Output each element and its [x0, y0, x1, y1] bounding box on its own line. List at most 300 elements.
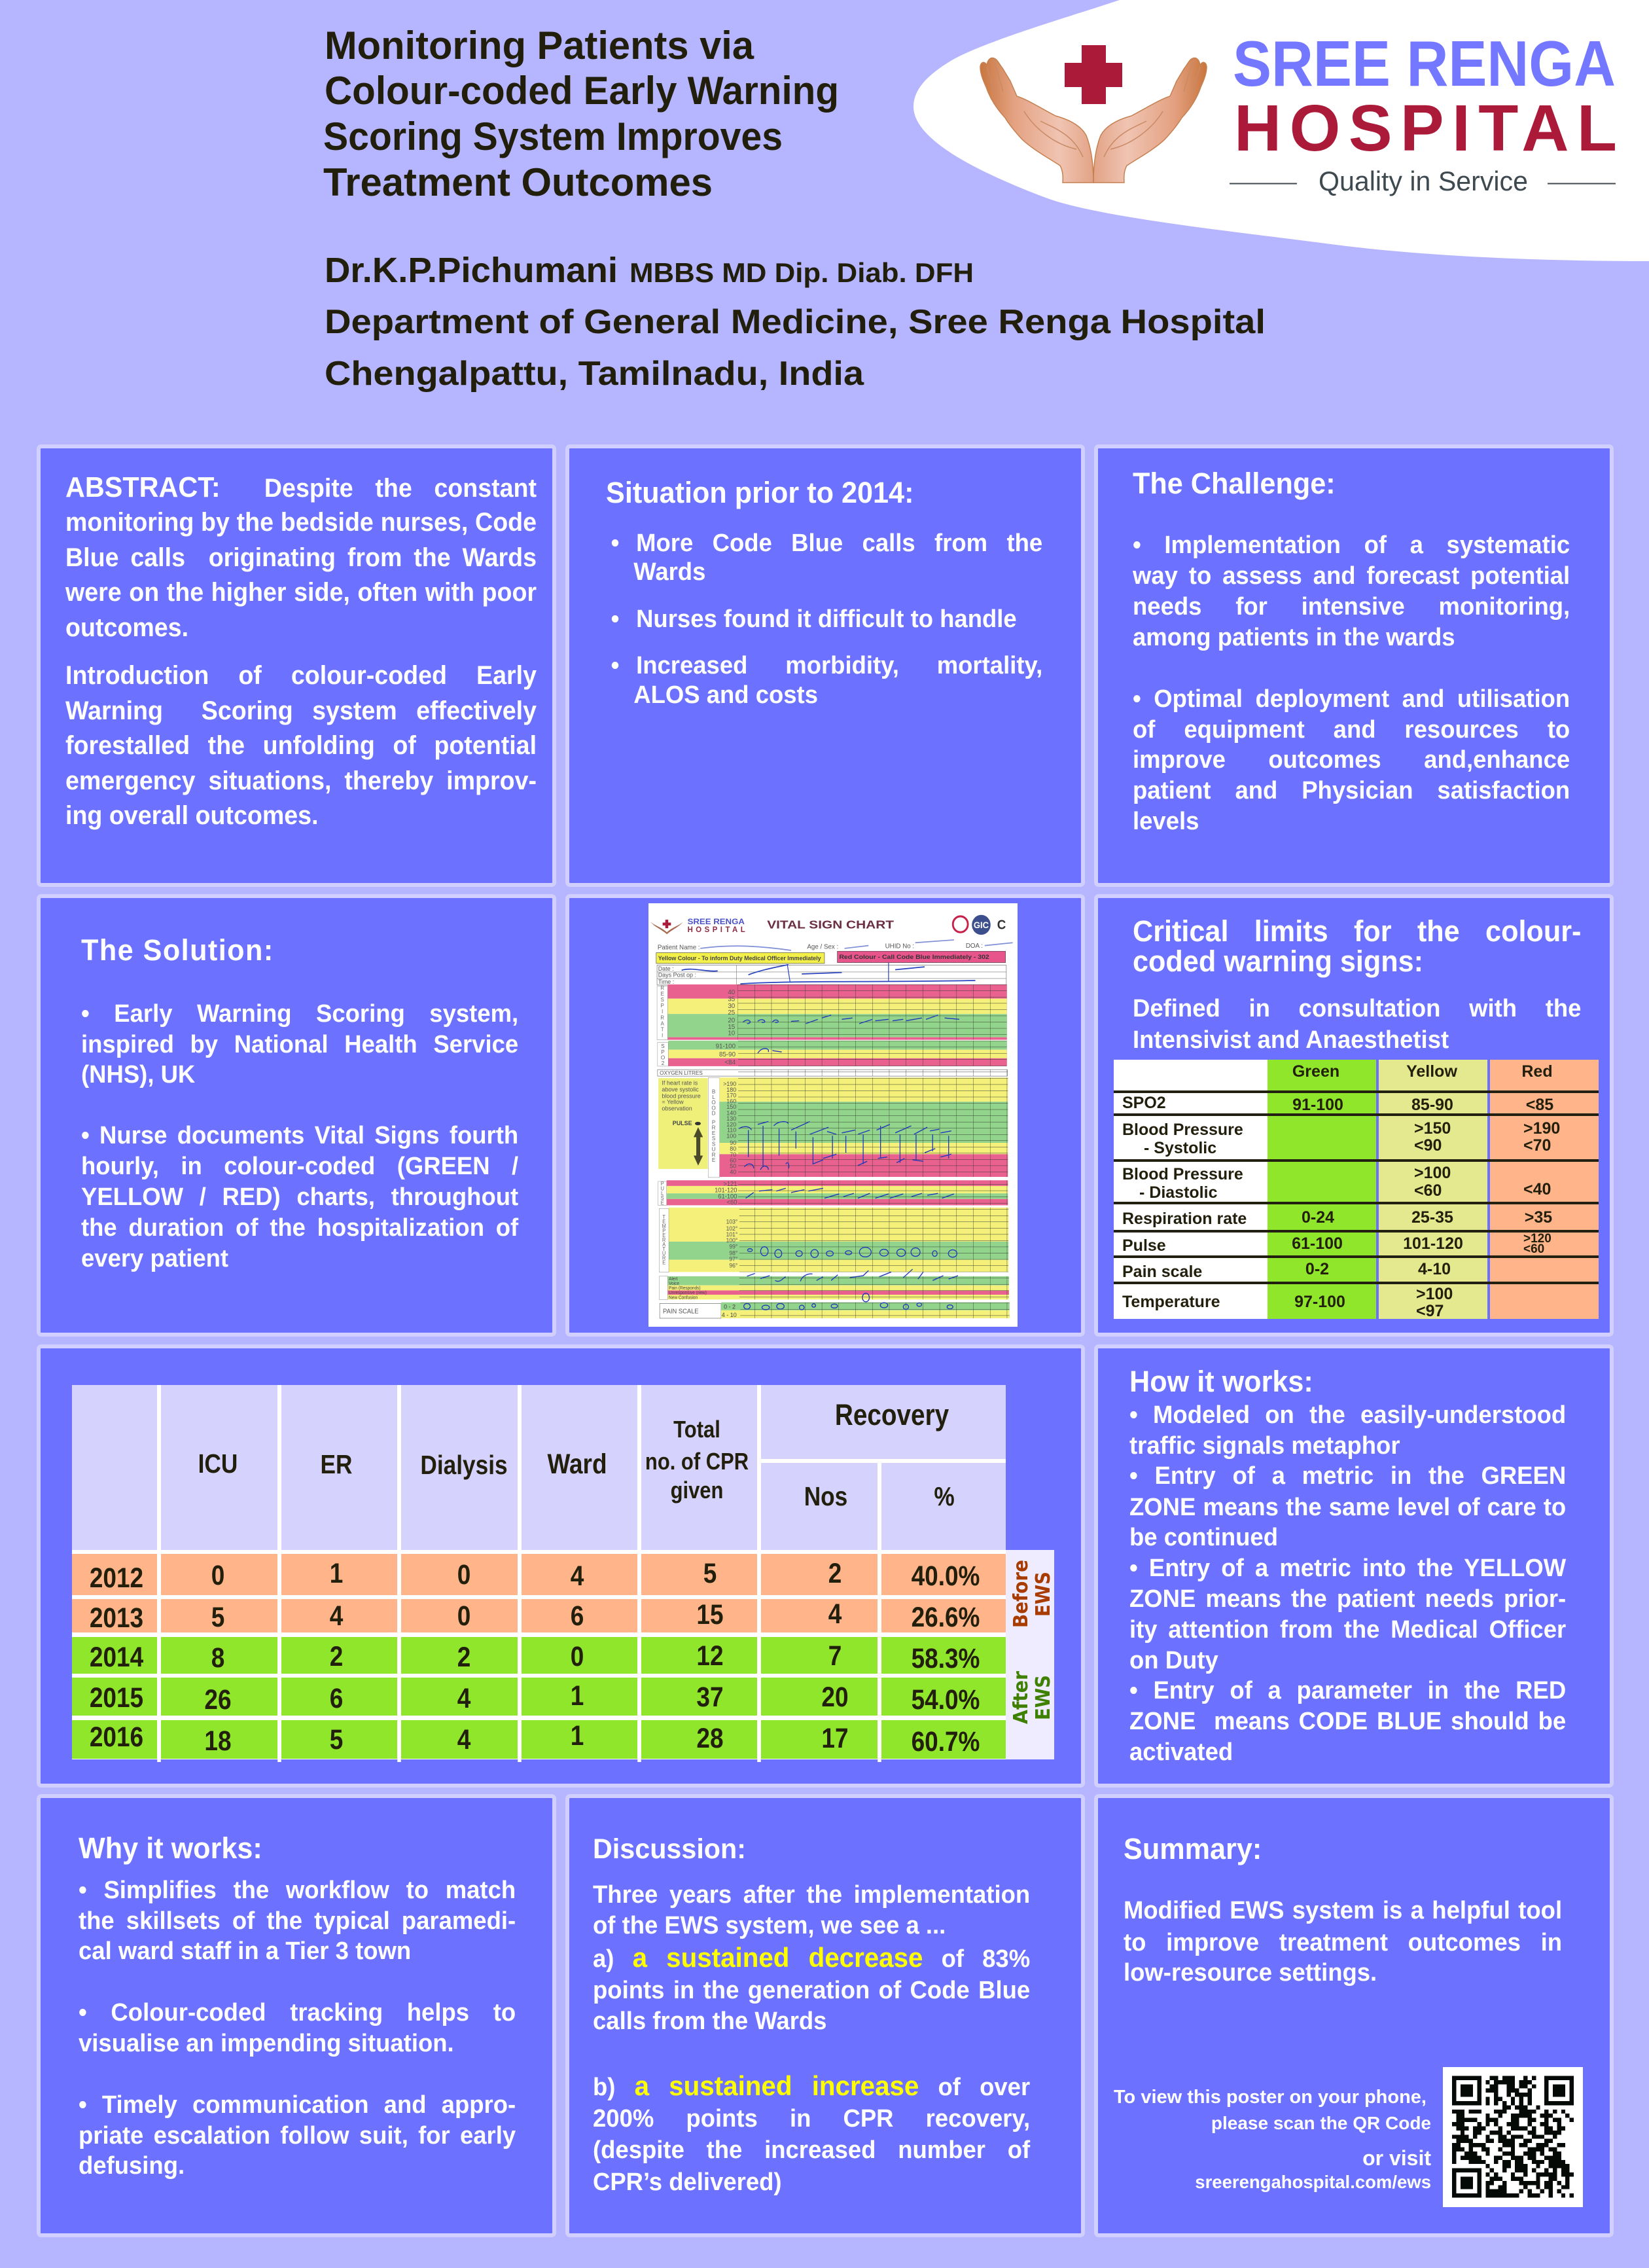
- limit values: 0-2: [1305, 1260, 1329, 1278]
- temperature band: E: [662, 1233, 665, 1238]
- row labels: - Diastolic: [1139, 1183, 1218, 1202]
- text: how it works content: ZONE means the same level of care to: [1129, 1494, 1566, 1521]
- blood pressure band: 70: [730, 1151, 736, 1158]
- blood pressure band: blood pressure: [662, 1092, 701, 1100]
- text: situation content: More Code Blue calls from the: [636, 530, 1042, 557]
- text: challenge content: • Implementation of a systematic: [1133, 531, 1570, 559]
- text: discussion content: calls from the Wards: [593, 2007, 826, 2035]
- text: situation content: [606, 476, 1042, 709]
- row 2012: 1: [330, 1558, 343, 1589]
- text: challenge content: improve outcomes and,enhance: [1133, 746, 1570, 774]
- limit values: >35: [1525, 1208, 1552, 1227]
- row labels: Blood Pressure: [1122, 1121, 1243, 1139]
- text: how it works content: • Entry of a parameter in the RED: [1129, 1677, 1566, 1704]
- row 2015: 20: [821, 1682, 849, 1713]
- temperature band: 98°: [729, 1250, 737, 1256]
- temperature band: 97°: [729, 1255, 737, 1262]
- text: how it works content: • Entry of a metric in the GREEN: [1129, 1462, 1566, 1490]
- respiration band: I: [662, 1009, 663, 1015]
- text: why it works content: priate escalation follow suit, for early: [79, 2122, 516, 2150]
- title: Colour-coded Early Warning: [325, 69, 839, 113]
- authors and affiliation: MBBS MD Dip. Diab. DFH: [629, 257, 974, 288]
- limit values: 101-120: [1403, 1234, 1463, 1253]
- pain scale: PAIN SCALE: [663, 1308, 699, 1316]
- text: discussion content: Discussion:: [593, 1833, 746, 1865]
- pulse band: S: [661, 1195, 664, 1201]
- text: solution content: YELLOW / RED) charts, throughout: [81, 1183, 518, 1211]
- temperature band: 103°: [726, 1218, 737, 1225]
- patient fields: UHID No :: [885, 943, 914, 950]
- text: solution content: The Solution:: [81, 933, 274, 967]
- limit values: <85: [1526, 1096, 1553, 1114]
- blood pressure band: 40: [730, 1168, 736, 1175]
- pulse band: >121: [723, 1181, 737, 1188]
- row 2016: 4: [457, 1724, 471, 1755]
- side label: before and after EWS: After: [1010, 1671, 1033, 1724]
- blood pressure band: 100: [726, 1132, 736, 1140]
- respiration band: E: [661, 991, 664, 997]
- row 2012: 0: [457, 1559, 470, 1591]
- text: solution content: the duration of the hospitalization of: [81, 1214, 518, 1242]
- header cells: [72, 1385, 1006, 1550]
- row 2014: 2014: [90, 1642, 144, 1673]
- limit values: 91-100: [1292, 1096, 1343, 1114]
- column headers: [1292, 1062, 1553, 1081]
- pulse band: L: [661, 1191, 664, 1197]
- panel: how it works: [1094, 1344, 1614, 1788]
- blood pressure band: observation: [662, 1105, 692, 1112]
- row labels: Respiration rate: [1122, 1210, 1247, 1228]
- blood pressure band: R: [712, 1151, 716, 1158]
- row labels: Temperature: [1122, 1293, 1220, 1311]
- header labels: given: [671, 1478, 723, 1504]
- header labels: [198, 1398, 955, 1512]
- row 2013: [90, 1598, 980, 1634]
- respiration band: P: [661, 1003, 664, 1009]
- text: situation content: ALOS and costs: [633, 681, 818, 709]
- text: discussion content: CPR’s delivered): [593, 2169, 782, 2196]
- pulse band: 101-120: [715, 1187, 737, 1195]
- text: solution content: [81, 933, 518, 1272]
- red alert box: Red Colour - Call Code Blue Immediately - 302: [839, 954, 989, 960]
- blood pressure band: = Yellow: [662, 1098, 684, 1106]
- text: how it works content: ZONE means CODE BLUE should be: [1129, 1708, 1566, 1735]
- header labels: no. of CPR: [645, 1449, 749, 1475]
- temperature band: T: [662, 1214, 665, 1220]
- pulse band: E: [661, 1200, 664, 1206]
- text: solution content: every patient: [81, 1245, 228, 1272]
- text: situation content: •: [611, 530, 619, 557]
- limit values: <60: [1523, 1242, 1544, 1256]
- SpO2 band: P: [661, 1049, 665, 1055]
- row 2015: 54.0%: [912, 1684, 980, 1716]
- text: how it works content: How it works:: [1129, 1365, 1313, 1398]
- chart title: VITAL SIGN CHART: [767, 918, 895, 931]
- row 2014: 2: [457, 1642, 470, 1673]
- patient fields: Age / Sex :: [807, 943, 838, 950]
- text: situation content: •: [611, 652, 619, 679]
- row 2015: 2015: [90, 1682, 143, 1714]
- header labels: Total: [673, 1417, 720, 1443]
- row 2013: 2013: [90, 1602, 143, 1634]
- row labels: - Systolic: [1144, 1139, 1216, 1157]
- limit values: >190: [1523, 1119, 1560, 1138]
- blood pressure band: D: [712, 1109, 716, 1117]
- blood pressure band: 130: [726, 1115, 736, 1122]
- column headers: Yellow: [1406, 1062, 1457, 1081]
- neuro band: New Confusion: [669, 1295, 698, 1301]
- row labels: Blood Pressure: [1122, 1165, 1243, 1183]
- pulse band: 61-100: [718, 1193, 737, 1200]
- pulse band: P: [661, 1181, 664, 1187]
- SpO2 band: 85-90: [719, 1051, 736, 1058]
- row 2013: 26.6%: [912, 1602, 980, 1633]
- text: abstract body: ing overall outcomes.: [65, 801, 319, 830]
- text: solution content: hourly, in colour-coded (GREEN /: [81, 1153, 518, 1180]
- text: challenge content: among patients in the wards: [1133, 624, 1455, 651]
- logo wordmark: [1230, 27, 1617, 196]
- row 2012: 5: [703, 1558, 717, 1589]
- row 2012: [90, 1558, 980, 1594]
- limit values: 0-24: [1302, 1208, 1334, 1227]
- text: abstract body: Blue calls originating from the Wards: [65, 543, 537, 572]
- row 2012: 40.0%: [912, 1560, 980, 1592]
- row 2014: 0: [571, 1641, 584, 1672]
- text: how it works content: ity attention from the Medical Officer: [1129, 1616, 1566, 1644]
- respiration band: 10: [728, 1030, 736, 1037]
- text: how it works content: traffic signals metaphor: [1129, 1432, 1400, 1460]
- text: abstract body: ABSTRACT: Despite the constant: [65, 471, 537, 503]
- text: discussion content: Three years after the implementation: [593, 1881, 1030, 1909]
- row 2015: [90, 1680, 980, 1716]
- row 2016: [90, 1720, 980, 1757]
- panel: summary: [1094, 1794, 1614, 2237]
- respiration band: T: [661, 1026, 664, 1033]
- text: discussion content: points in the generation of Code Blue: [593, 1977, 1030, 2004]
- SpO2 band: 2: [662, 1060, 665, 1066]
- text: QR code instructions: or visit: [1362, 2146, 1431, 2170]
- icon: right hand: [1093, 58, 1207, 183]
- panel: CPR data table: [37, 1344, 1085, 1788]
- limit values: >100: [1416, 1285, 1453, 1303]
- header labels: Nos: [804, 1482, 847, 1512]
- limit values: 25-35: [1411, 1208, 1453, 1227]
- pain scale: 0 - 2: [724, 1303, 736, 1310]
- temperature band: 100°: [726, 1237, 737, 1244]
- row 2013: 15: [696, 1599, 724, 1630]
- side label: before and after EWS: EWS: [1032, 1572, 1054, 1617]
- temperature band: 99°: [729, 1244, 737, 1250]
- blood pressure band: 140: [726, 1109, 736, 1117]
- text: critical limits heading: [1133, 914, 1581, 1054]
- text: summary content: Modified EWS system is a helpful tool: [1124, 1897, 1562, 1924]
- text: how it works content: ZONE means the patient needs prior-: [1129, 1585, 1566, 1613]
- authors and affiliation: [325, 251, 1266, 393]
- text: critical limits heading: Defined in consultation with the: [1133, 995, 1581, 1022]
- neuro band: Unresponsive (new): [669, 1291, 707, 1295]
- text: discussion content: b) a sustained increase of over: [593, 2070, 1030, 2101]
- blood pressure band: R: [712, 1124, 716, 1131]
- side label: before and after EWS: [1006, 1550, 1055, 1759]
- text: challenge content: [1132, 467, 1570, 835]
- chart header logo: SREE RENGA: [688, 918, 745, 926]
- header labels: %: [934, 1482, 955, 1512]
- text: QR code instructions: To view this poster on your phone,: [1114, 2087, 1427, 2108]
- neuro band: Alert: [669, 1277, 678, 1282]
- row 2016: 18: [204, 1725, 232, 1757]
- row 2013: 0: [457, 1600, 470, 1632]
- logo wordmark: HOSPITAL: [1234, 92, 1617, 165]
- pain scale: 4 - 10: [722, 1312, 737, 1318]
- text: how it works content: activated: [1129, 1738, 1233, 1766]
- logo wordmark: SREE RENGA: [1233, 27, 1616, 99]
- logo wordmark: Quality in Service: [1319, 166, 1528, 196]
- respiration band: [657, 984, 1007, 1040]
- chart: scanned vital sign chart: [648, 903, 1018, 1327]
- header labels: Dialysis: [420, 1450, 508, 1481]
- blood pressure band: above systolic: [662, 1086, 699, 1093]
- temperature band: T: [662, 1246, 665, 1252]
- limit values: 4-10: [1418, 1260, 1451, 1278]
- blood pressure band: If heart rate is: [662, 1079, 698, 1087]
- row 2014: 58.3%: [912, 1643, 980, 1674]
- text: challenge content: way to assess and forecast potential: [1133, 562, 1570, 590]
- limit values: >150: [1414, 1119, 1451, 1138]
- blood pressure band: S: [712, 1140, 716, 1147]
- text: critical limits heading: Intensivist and Anaesthetist: [1133, 1026, 1449, 1054]
- blood pressure band: 160: [726, 1098, 736, 1104]
- row labels: Pain scale: [1122, 1263, 1202, 1281]
- temperature band: [659, 1208, 1008, 1272]
- row 2012: 2012: [90, 1562, 143, 1594]
- limit values: 85-90: [1411, 1096, 1453, 1114]
- chart header logo: HOSPITAL: [688, 925, 745, 934]
- blood pressure band: U: [712, 1145, 716, 1153]
- text: why it works content: • Colour-coded tracking helps to: [79, 1999, 516, 2026]
- header: title, authors and logo: [323, 0, 1649, 393]
- row 2012: 4: [571, 1560, 584, 1592]
- temperature band: 102°: [726, 1225, 737, 1232]
- row labels: [1122, 1094, 1247, 1311]
- respiration band: 15: [728, 1024, 736, 1031]
- neuro band: Voice: [669, 1282, 679, 1286]
- pulse band: U: [661, 1185, 664, 1191]
- temperature band: R: [662, 1237, 666, 1243]
- date and time rows: Days Post op :: [658, 972, 696, 979]
- row 2015: 6: [330, 1683, 343, 1714]
- text: abstract body: monitoring by the bedside nurses, Code: [65, 508, 537, 537]
- panel: why it works: [37, 1794, 556, 2237]
- blood pressure band: 90: [730, 1140, 736, 1146]
- text: summary content: low-resource settings.: [1124, 1959, 1377, 1987]
- header labels: Ward: [547, 1449, 607, 1480]
- text: solution content: inspired by National Health Service: [81, 1031, 518, 1058]
- text: why it works content: • Simplifies the workflow to match: [79, 1877, 516, 1904]
- temperature band: 96°: [729, 1262, 737, 1269]
- text: abstract body: Introduction of colour-coded Early: [65, 661, 537, 690]
- row 2016: 60.7%: [912, 1726, 980, 1757]
- yellow alert box: [656, 952, 824, 963]
- blood pressure band: [658, 1077, 1008, 1178]
- limit values: <90: [1414, 1136, 1442, 1155]
- blood pressure band: E: [712, 1130, 716, 1136]
- limit values: <60: [1414, 1181, 1442, 1200]
- side label: before and after EWS: EWS: [1032, 1675, 1054, 1720]
- text: why it works content: • Timely communication and appro-: [79, 2091, 516, 2119]
- SpO2 band: <84: [724, 1059, 736, 1066]
- patient fields: Patient Name :: [658, 944, 700, 952]
- neuro band: [659, 1276, 1009, 1301]
- respiration band: S: [661, 997, 664, 1003]
- blood pressure band: 170: [726, 1092, 736, 1099]
- text: critical limits heading: coded warning signs:: [1133, 945, 1423, 978]
- icon: hospital cross: [1065, 45, 1122, 104]
- limit values: <40: [1523, 1180, 1551, 1198]
- column headers: Red: [1521, 1062, 1553, 1081]
- text: abstract body: forestalled the unfolding of potential: [65, 731, 537, 760]
- authors and affiliation: Dr.K.P.Pichumani: [325, 251, 618, 290]
- red alert box: [838, 951, 1006, 963]
- blood pressure band: >190: [723, 1081, 736, 1087]
- row 2016: 1: [571, 1720, 584, 1752]
- text: challenge content: needs for intensive monitoring,: [1133, 593, 1570, 621]
- text: summary content: to improve treatment outcomes in: [1124, 1929, 1562, 1956]
- row 2016: 17: [821, 1723, 849, 1754]
- row 2013: 4: [330, 1600, 344, 1632]
- limit values: <70: [1523, 1136, 1551, 1155]
- blood pressure band: O: [711, 1099, 716, 1106]
- text: QR code instructions: [1114, 2087, 1431, 2192]
- header labels: Recovery: [835, 1398, 949, 1431]
- row 2014: 7: [828, 1640, 842, 1672]
- row 2016: 5: [330, 1724, 343, 1755]
- temperature band: P: [662, 1228, 665, 1234]
- text: abstract body: emergency situations, thereby improv-: [65, 766, 537, 795]
- handwritten readings: [739, 1015, 959, 1310]
- row 2014: [90, 1640, 980, 1674]
- text: summary content: Summary:: [1124, 1832, 1262, 1865]
- respiration band: 20: [728, 1017, 736, 1024]
- title: Scoring System Improves: [323, 115, 783, 158]
- respiration band: 35: [728, 996, 736, 1003]
- text: situation content: •: [611, 605, 619, 633]
- text: abstract body: outcomes.: [65, 613, 188, 642]
- row 2015: 1: [571, 1680, 584, 1712]
- blood pressure band: 50: [730, 1162, 736, 1170]
- text: solution content: • Nurse documents Vital Signs fourth: [81, 1122, 518, 1149]
- oxygen row: [658, 1070, 1007, 1076]
- icon: left hand: [980, 58, 1093, 183]
- text: solution content: • Early Warning Scoring system,: [81, 1000, 518, 1028]
- logo white background: [913, 0, 1649, 261]
- text: how it works content: on Duty: [1129, 1647, 1218, 1674]
- panel: vital sign chart photo: [565, 894, 1085, 1337]
- text: challenge content: of equipment and resources to: [1133, 716, 1570, 744]
- row 2015: 37: [696, 1682, 724, 1713]
- blood pressure band: 110: [727, 1126, 736, 1134]
- blood pressure band: 60: [730, 1157, 736, 1164]
- panel: abstract: [37, 444, 556, 887]
- title: Treatment Outcomes: [323, 160, 713, 204]
- row 2014: 2: [330, 1641, 343, 1672]
- pulse band: <60: [727, 1199, 737, 1206]
- blood pressure band: E: [712, 1157, 716, 1163]
- text: how it works content: • Modeled on the easily-understood: [1129, 1401, 1566, 1429]
- temperature band: E: [662, 1259, 665, 1266]
- row 2013: 6: [571, 1600, 584, 1632]
- panel: the solution: [37, 894, 556, 1337]
- blood pressure band: 120: [726, 1121, 736, 1128]
- row 2013: 5: [211, 1602, 224, 1633]
- respiration band: 40: [728, 989, 736, 996]
- panel: situation prior to 2014: [565, 444, 1085, 887]
- limit values: >120: [1523, 1232, 1551, 1246]
- row labels: Pulse: [1122, 1236, 1166, 1255]
- header labels: ICU: [198, 1449, 238, 1479]
- accreditation badges: [953, 915, 1006, 935]
- text: QR code instructions: please scan the QR Code: [1211, 2113, 1431, 2133]
- panel: critical limits: [1094, 894, 1614, 1337]
- row 2013: 4: [828, 1598, 842, 1630]
- date and time rows: Time :: [658, 979, 674, 985]
- row 2015: 4: [457, 1683, 471, 1714]
- temperature band: E: [662, 1219, 665, 1225]
- table: CPR by year: [72, 1385, 1054, 1762]
- text: discussion content: of the EWS system, we see a ...: [593, 1912, 946, 1939]
- oxygen row: OXYGEN LITRES: [660, 1070, 703, 1076]
- accreditation badges: C: [997, 918, 1006, 933]
- text: summary content: [1124, 1832, 1562, 1987]
- SpO2 band: O: [661, 1054, 665, 1061]
- respiration band: I: [662, 1032, 663, 1039]
- row 2016: 2016: [90, 1721, 143, 1753]
- row 2015: 26: [204, 1684, 232, 1716]
- row 2012: 0: [211, 1560, 224, 1591]
- title: Monitoring Patients via: [325, 24, 754, 67]
- side label: before and after EWS: Before: [1010, 1560, 1033, 1628]
- SpO2 band: 91-100: [716, 1043, 736, 1051]
- patient fields: DOA :: [966, 943, 983, 950]
- panel: the challenge: [1094, 444, 1614, 887]
- text: situation content: Increased morbidity, mortality,: [636, 652, 1042, 679]
- text: why it works content: visualise an impending situation.: [79, 2030, 454, 2057]
- respiration band: A: [661, 1020, 664, 1027]
- accreditation badges: GIC: [974, 920, 989, 930]
- title: [323, 24, 839, 204]
- icon: QR code: [1443, 2067, 1583, 2207]
- respiration band: 30: [728, 1003, 736, 1010]
- text: why it works content: the skillsets of the typical paramedi-: [79, 1907, 516, 1935]
- date and time rows: Date :: [658, 965, 674, 972]
- header labels: ER: [321, 1450, 352, 1480]
- text: challenge content: • Optimal deployment and utilisation: [1133, 685, 1570, 713]
- text: how it works content: [1129, 1365, 1567, 1766]
- chart header logo: [650, 918, 745, 934]
- pulse band: [658, 1180, 1008, 1206]
- temperature band: R: [662, 1255, 666, 1261]
- text: discussion content: a) a sustained decrease of 83%: [593, 1942, 1030, 1973]
- respiration band: 25: [728, 1009, 736, 1017]
- respiration band: R: [660, 985, 664, 991]
- text: why it works content: defusing.: [79, 2152, 185, 2180]
- neuro band: Pain (Responds): [669, 1286, 701, 1291]
- patient fields: [658, 940, 1013, 952]
- text: situation content: Situation prior to 2014:: [606, 476, 913, 509]
- blood pressure band: S: [712, 1135, 716, 1142]
- respiration band: R: [660, 1015, 664, 1020]
- row 2014: 12: [696, 1640, 724, 1672]
- text: discussion content: [593, 1833, 1030, 2196]
